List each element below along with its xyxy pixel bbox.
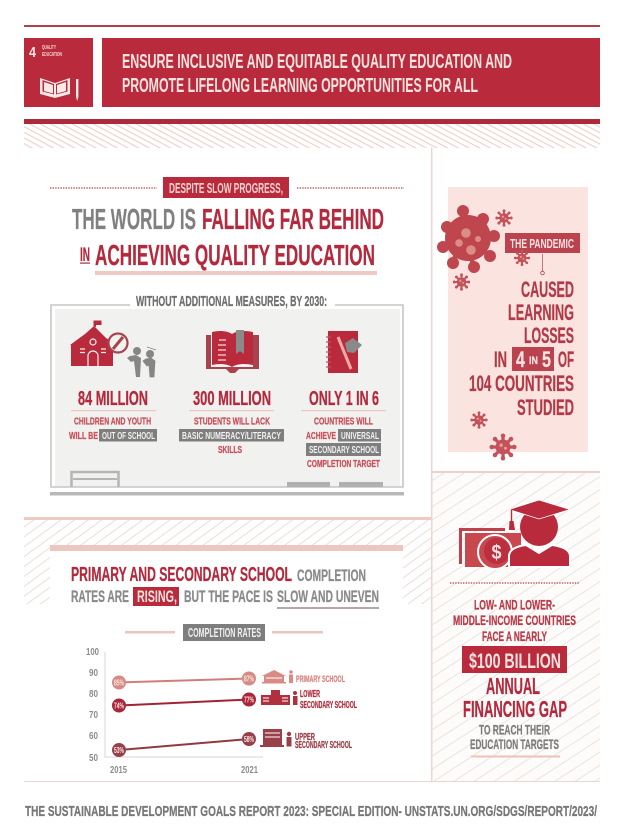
hatched band [24, 124, 600, 148]
series: upper secondary: 58% [244, 735, 254, 744]
stat: 84 million [69, 388, 157, 442]
statement: financing gap: LOW- AND LOWER- [474, 598, 555, 612]
stat: only 1 in 6: ONLY 1 IN 6 [309, 388, 379, 410]
series: primary school [112, 672, 256, 690]
icon: large virus [437, 205, 500, 273]
statement: learning losses: OF [558, 347, 574, 372]
stat: 300 million [179, 388, 284, 456]
series: lower secondary: 74% [114, 702, 124, 710]
icon: graduate and money: $ [492, 542, 502, 564]
heading: BUT THE PACE IS [184, 588, 273, 606]
icon: closed school with children [70, 321, 156, 377]
statement: financing gap: ANNUAL [486, 673, 540, 699]
heading [71, 564, 379, 609]
line chart: 70 [89, 710, 98, 721]
legend: upper secondary school: UPPER [295, 732, 315, 743]
cropped bottom shapes [72, 472, 383, 487]
legend: upper secondary school: SECONDARY SCHOOL [295, 740, 352, 751]
series: lower secondary: 77% [244, 696, 254, 704]
line chart [86, 647, 263, 776]
panel heading: WITHOUT ADDITIONAL MEASURES, BY 2030: [136, 294, 327, 310]
series: primary school: 85% [114, 678, 124, 688]
statement: learning losses: 5 [542, 347, 551, 372]
heading: COMPLETION [297, 567, 366, 585]
line chart: 80 [89, 689, 98, 700]
stat: only 1 in 6: COMPLETION TARGET [307, 458, 380, 470]
series: upper secondary: 53% [114, 746, 124, 755]
series: lower secondary [112, 692, 256, 712]
statement: financing gap: $100 BILLION [469, 650, 561, 673]
stat: only 1 in 6: UNIVERSAL [341, 430, 379, 442]
panel: completion rates [50, 545, 403, 776]
label: the pandemic [505, 233, 580, 275]
stat: 84 million: OUT OF SCHOOL [102, 430, 155, 442]
heading: RATES ARE [71, 588, 129, 606]
legend: lower secondary school: LOWER [300, 689, 320, 700]
header bar [24, 119, 600, 124]
callout: despite slow progress [50, 177, 404, 198]
goal 4 logo tile: 4 [29, 44, 37, 61]
line chart: 50 [89, 753, 98, 764]
series: upper secondary [112, 732, 256, 757]
main title: ACHIEVING QUALITY EDUCATION [95, 240, 375, 272]
legend: lower secondary school: SECONDARY SCHOOL [300, 700, 357, 711]
heading: PRIMARY AND SECONDARY SCHOOL [71, 564, 292, 586]
chart label [125, 624, 323, 641]
chart label: COMPLETION RATES [188, 626, 261, 640]
icon: small viruses [453, 209, 516, 460]
line chart: 2015 [110, 765, 127, 776]
stat: only 1 in 6: ACHIEVE [306, 430, 336, 442]
panel dividers [24, 147, 600, 782]
stat: only 1 in 6 [301, 388, 386, 470]
stat: 84 million: WILL BE [69, 430, 98, 442]
series: primary school: 87% [244, 674, 254, 684]
lower left hatched background [24, 520, 431, 604]
stat: 84 million: CHILDREN AND YOUTH [74, 416, 151, 428]
statement: financing gap: FACE A NEARLY [482, 629, 547, 644]
line chart: 100 [86, 647, 99, 658]
statement: learning losses: 4 [516, 347, 526, 372]
line chart: 90 [89, 668, 98, 679]
statement: learning losses: LEARNING [508, 300, 574, 325]
stat: only 1 in 6: SECONDARY SCHOOL [309, 444, 379, 456]
stat: 300 million: SKILLS [218, 444, 242, 456]
icon: open book [206, 330, 259, 373]
panel: by 2030 projections [50, 294, 404, 496]
goal 4 logo tile [24, 38, 93, 107]
stat: 300 million: STUDENTS WILL LACK [194, 416, 270, 428]
statement: learning losses: STUDIED [517, 395, 574, 420]
top rule [24, 25, 600, 27]
statement: financing gap: TO REACH THEIR [479, 722, 550, 738]
line chart: 60 [89, 731, 98, 742]
stat: 300 million: BASIC NUMERACY/LITERACY [182, 430, 281, 442]
stat: 84 million: 84 MILLION [78, 388, 148, 410]
main title: FALLING FAR BEHIND [202, 204, 384, 236]
label: the pandemic: THE PANDEMIC [510, 236, 574, 251]
heading: SLOW AND UNEVEN [277, 588, 379, 606]
statement: financing gap [453, 598, 576, 758]
stat: only 1 in 6: COUNTRIES WILL [314, 416, 373, 428]
goal 4 logo tile: QUALITY [42, 45, 56, 51]
statement: learning losses [469, 277, 574, 420]
line chart: 2021 [241, 765, 258, 776]
main title: IN [80, 245, 90, 266]
statement: learning losses: LOSSES [524, 323, 574, 348]
statement: financing gap: EDUCATION TARGETS [470, 737, 559, 752]
heading: RISING, [137, 588, 177, 606]
legend: lower secondary school [261, 689, 357, 711]
panel: financing gap [450, 500, 580, 758]
callout: despite slow progress: DESPITE SLOW PROGRESS, [169, 181, 283, 197]
icon: notebook and pencil [326, 331, 362, 373]
statement: learning losses: IN [494, 347, 507, 372]
goal 4 logo tile: EDUCATION [42, 52, 62, 58]
banner [102, 38, 600, 107]
lower right hatched panel background [432, 473, 600, 781]
legend: upper secondary school [260, 729, 352, 751]
main title [72, 204, 384, 275]
legend: primary school: PRIMARY SCHOOL [296, 674, 345, 685]
statement: learning losses: IN [529, 355, 538, 367]
stat: 300 million: 300 MILLION [193, 388, 271, 410]
main title: THE WORLD IS [72, 204, 196, 236]
icon: graduate and money [459, 500, 570, 569]
panel: pandemic [437, 187, 588, 460]
legend: primary school [262, 670, 345, 685]
statement: learning losses: CAUSED [521, 277, 574, 302]
